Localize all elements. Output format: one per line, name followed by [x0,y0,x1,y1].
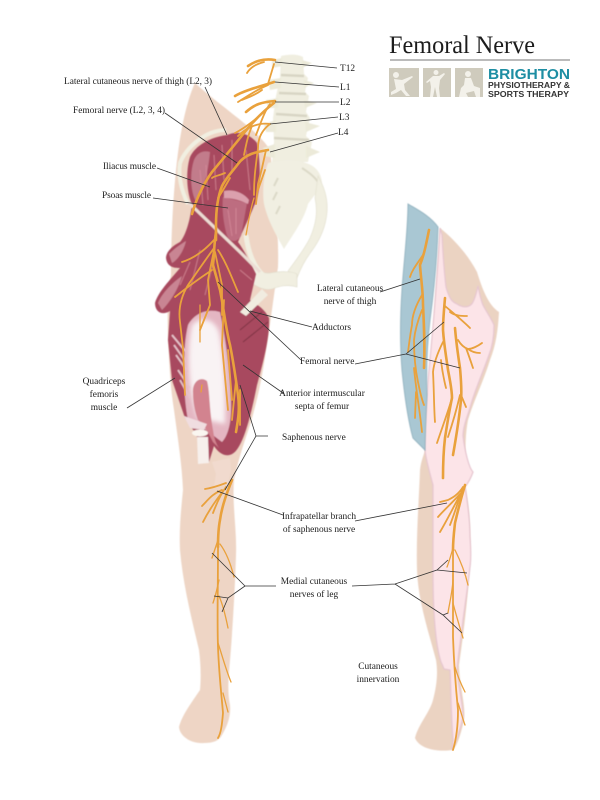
label: medial cutaneous nerves of leg: nerves of leg [290,589,339,600]
muscle fibre strokes [180,140,252,295]
label: L3: L3 [339,113,350,123]
nerves, right figure [408,230,482,750]
inguinal ligament [188,202,260,272]
psoas column [223,197,247,241]
label: saphenous nerve: Saphenous nerve [282,433,346,443]
right figure: cutaneous innervation pink zone [425,228,494,750]
label: lateral cutaneous nerve of thigh, right: Lateral cutaneous [317,284,384,294]
quadriceps tendon fan [184,311,231,442]
lateral vastus white streaks [172,335,190,398]
patella [192,430,208,436]
left pelvic rim [179,130,226,204]
sacrum and iliac wing [263,160,322,249]
iliacus shading [191,151,210,202]
left figure: anterior leg skin [168,83,278,743]
label: adductors: Adductors [312,323,351,333]
logo: Brighton Physiotherapy & Sports Therapy: BRIGHTON [488,67,570,83]
leader lines, left figure labels [127,62,339,612]
pubis [238,262,297,290]
label: iliacus muscle: Iliacus muscle [103,162,156,172]
right ilium ring [288,176,327,278]
white tendon patch at adductor [240,289,268,316]
logo: Brighton Physiotherapy & Sports Therapy: SPORTS THERAPY [488,90,570,99]
label: lateral cutaneous nerve of thigh, right: nerve of thigh [324,296,377,307]
iliacus and psoas muscles with quadriceps [155,133,269,488]
label: cutaneous innervation: innervation [357,675,400,685]
label: infrapatellar branch: Infrapatellar branch [282,511,356,522]
logo: Brighton Physiotherapy & Sports Therapy: PHYSIOTHERAPY & [488,81,570,90]
psoas tendon band [224,190,249,204]
label: quadriceps femoris muscle: muscle [91,403,117,413]
label: infrapatellar branch: of saphenous nerve [283,524,355,535]
adductor line [240,312,268,342]
transverse processes [263,58,320,158]
title: Femoral Nerve [389,30,535,59]
label: quadriceps femoris muscle: Quadriceps [83,377,126,387]
pelvis and lumbar spine [179,55,327,290]
right figure: posterior leg skin [415,228,499,751]
tensor flap highlight [158,276,182,310]
label: anterior intermuscular septa of femur: septa of femur [295,401,350,412]
label: anterior intermuscular septa of femur: Anterior intermuscular [279,389,366,399]
femoral nerve branches, left figure [175,59,275,738]
lumbar column [272,55,312,162]
patellar tendon [197,437,209,464]
rectus femoris end [193,379,219,448]
right figure: lateral cutaneous blue zone [400,204,438,450]
label: femoral nerve: Femoral nerve [300,357,354,367]
label: psoas muscle: Psoas muscle [102,191,151,201]
label: L1: L1 [340,83,351,93]
label: T12: T12 [340,64,355,74]
label: quadriceps femoris muscle: femoris [90,389,119,400]
logo: Brighton Physiotherapy & Sports Therapy [389,60,570,99]
lateral retinaculum [184,416,207,430]
label: cutaneous innervation: Cutaneous [358,662,398,672]
label: L4: L4 [338,128,349,138]
vertebral shading [274,75,309,140]
label: lateral cutaneous nerve of thigh: Lateral cutaneous nerve of thigh (L2, 3) [64,76,212,87]
leader lines, right figure labels [352,279,467,633]
label: femoral nerve roots: Femoral nerve (L2, 3, 4) [73,105,165,116]
label: medial cutaneous nerves of leg: Medial cutaneous [281,577,348,587]
label: L2: L2 [340,98,351,108]
